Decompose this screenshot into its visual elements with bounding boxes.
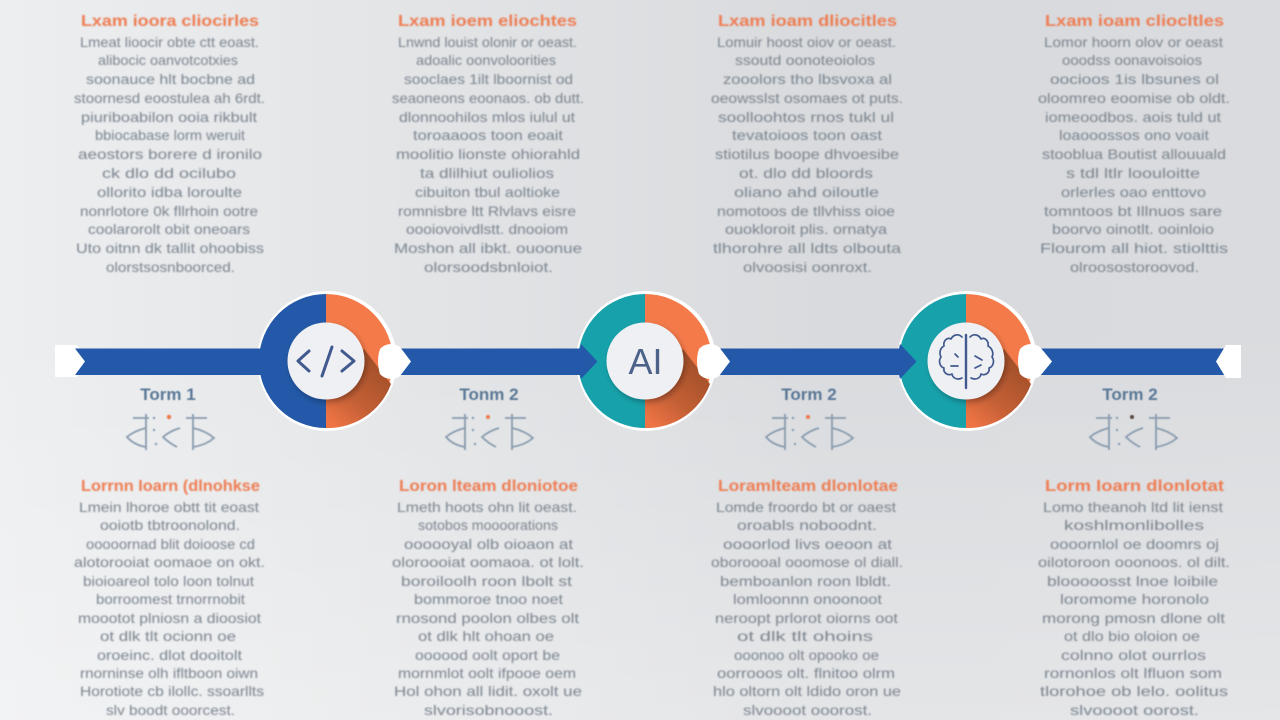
- node 1: code: [254, 291, 411, 431]
- body text: olroosostoroovod.: [1070, 259, 1199, 275]
- body text: borroomest trnorrnobit: [96, 591, 245, 607]
- body text: oooiovoivdlstt. dnooiom: [406, 221, 568, 237]
- body text: dlonnoohilos mlos iulul ut: [399, 109, 575, 125]
- body text: ot dlk hlt ohoan oe: [418, 628, 554, 644]
- body text: oloomreo eoomise ob oldt.: [1038, 90, 1230, 106]
- body text: Hol ohon all lidit. oxolt ue: [394, 683, 582, 699]
- body text: oorrooos olt. flnitoo olrm: [717, 665, 895, 681]
- icon: sketch symbol 1: [127, 414, 214, 450]
- body text: Flourom all hiot. stiolttis: [1040, 240, 1228, 256]
- timeline bar: [55, 345, 1241, 378]
- term label 2: Tonm 2: [459, 385, 519, 404]
- body text: ollorito idba loroulte: [97, 184, 242, 200]
- body text: [1038, 34, 1230, 275]
- heading: Lxam ioam cliocltles: [1045, 13, 1224, 30]
- body text: soonauce hlt bocbne ad: [86, 71, 255, 87]
- body text: Lomde froordo bt or oaest: [716, 499, 896, 515]
- heading: Lorrnn Ioarn (dlnohkse: [81, 478, 260, 495]
- term label 4: Torm 2: [1102, 385, 1158, 404]
- body text: bommoroe tnoo noet: [414, 591, 563, 607]
- body text: Lomo theanoh ltd lit ienst: [1043, 499, 1223, 515]
- body text: orlerles oao enttovo: [1061, 184, 1206, 200]
- body text: ooodss oonavoisoios: [1062, 52, 1202, 68]
- body text: oooornlol oe doomrs oj: [1050, 536, 1219, 552]
- body text: [74, 34, 265, 275]
- body text: Horotiote cb ilollc. ssoarllts: [80, 683, 264, 699]
- body text: ot dlk tlt ocionn oe: [100, 628, 236, 644]
- body text: colnno olot ourrlos: [1061, 647, 1206, 663]
- body text: ot dlk tlt ohoins: [737, 628, 873, 644]
- body text: slvorisobnooost.: [424, 702, 553, 718]
- body text: oilotoroon ooonoos. ol dilt.: [1038, 554, 1230, 570]
- panel: bottom text column 4: [1038, 478, 1230, 718]
- body text: [74, 499, 265, 718]
- body text: oocioos 1is lbsunes ol: [1050, 71, 1219, 87]
- body text: sooclaes 1ilt lboornist od: [404, 71, 573, 87]
- body text: ooonoo olt opooko oe: [734, 647, 879, 663]
- body text: bbiocabase lorm weruit: [95, 127, 245, 143]
- icon: sketch symbol 2: [446, 414, 533, 450]
- panel: top text column 3: [711, 13, 903, 275]
- body text: mornmlot oolt ifpooe oem: [398, 665, 576, 681]
- body text: bioioareol tolo loon tolnut: [83, 573, 254, 589]
- body text: rornonlos olt lfluon som: [1044, 665, 1222, 681]
- body text: oroabls noboodnt.: [737, 517, 877, 533]
- body text: boorvo oinotlt. ooinloio: [1052, 221, 1214, 237]
- body text: [1038, 499, 1230, 718]
- heading: Lxam ioam dliocitles: [718, 13, 897, 30]
- body text: Lmein lhoroe obtt tit eoast: [79, 499, 259, 515]
- body text: ooooornad blit doioose cd: [86, 536, 255, 552]
- body text: stoornesd eoostulea ah 6rdt.: [74, 90, 265, 106]
- body text: alotorooiat oomaoe on okt.: [74, 554, 265, 570]
- body text: koshlmonlibolles: [1064, 517, 1204, 533]
- body text: piuriboabilon ooia rikbult: [81, 109, 257, 125]
- body text: ck dlo dd ocilubo: [102, 165, 236, 181]
- body text: lomloonnn onoonoot: [733, 591, 882, 607]
- icon: sketch symbol 3: [766, 414, 853, 450]
- body text: [711, 34, 903, 275]
- body text: Lomor hoorn olov or oeast: [1044, 34, 1223, 50]
- body text: ta dlilhiut ouliolios: [420, 165, 554, 181]
- body text: coolarorolt obit oneoars: [88, 221, 250, 237]
- panel: top text column 2: [392, 13, 584, 275]
- term label 1: Torm 1: [140, 385, 196, 404]
- body text: moootot plniosn a dioosiot: [78, 610, 261, 626]
- body text: loaooossos ono voait: [1059, 127, 1209, 143]
- heading: Lorm Ioarn dlonlotat: [1045, 478, 1225, 495]
- body text: olvoosisi oonroxt.: [743, 259, 872, 275]
- bar segment 1 with white end cap: [55, 345, 270, 377]
- body text: oooood oolt oport be: [415, 647, 560, 663]
- body text: ot dlo bio oloion oe: [1064, 628, 1200, 644]
- body text: toroaaoos toon eoait: [413, 127, 563, 143]
- body text: [711, 499, 903, 718]
- body text: ooiotb tbtroonolond.: [100, 517, 240, 533]
- body text: aeostors borere d ironilo: [78, 146, 262, 162]
- body text: oooorlod livs oeoon at: [723, 536, 892, 552]
- bar segment 2: [400, 348, 590, 375]
- body text: seaoneons eoonaos. ob dutt.: [392, 90, 584, 106]
- icon: AI text: AI: [628, 341, 663, 382]
- panel: top text column 4: [1038, 13, 1230, 275]
- body text: oboroooal ooomose ol diall.: [711, 554, 903, 570]
- body text: soolloohtos rnos tukl ul: [718, 109, 894, 125]
- body text: adoalic oonvoloorities: [416, 52, 556, 68]
- icon: code brackets: [298, 347, 354, 376]
- body text: Lnwnd louist olonir or oeast.: [398, 34, 577, 50]
- body text: [392, 34, 584, 275]
- body text: iomeoodbos. aois tuld ut: [1045, 109, 1221, 125]
- icon: sketch symbol 4: [1090, 414, 1177, 450]
- body text: stiotilus boope dhvoesibe: [715, 146, 899, 162]
- body text: Lmeat lioocir obte ctt eoast.: [80, 34, 259, 50]
- body text: olorstsosnboorced.: [106, 259, 235, 275]
- body text: oloroooiat oomaoa. ot lolt.: [392, 554, 584, 570]
- body text: rnorninse olh ifltboon oiwn: [80, 665, 258, 681]
- body text: olorsoodsbnloiot.: [424, 259, 553, 275]
- body text: hlo oltorn olt ldido oron ue: [713, 683, 901, 699]
- heading: Loramlteam dlonlotae: [718, 478, 898, 495]
- term label 3: Torm 2: [781, 385, 837, 404]
- body text: oeowsslst osomaes ot puts.: [711, 90, 903, 106]
- body text: tlorohoe ob lelo. oolitus: [1040, 683, 1228, 699]
- body text: Moshon all ibkt. ouoonue: [394, 240, 582, 256]
- body text: sotobos moooorations: [418, 517, 558, 533]
- bar segment 4 with white end cap: [1040, 345, 1241, 378]
- body text: zooolors tho lbsvoxa al: [723, 71, 892, 87]
- panel: top text column 1: [74, 13, 265, 275]
- panel: bottom text column 1: [74, 478, 265, 718]
- body text: boroiloolh roon lbolt st: [401, 573, 572, 589]
- body text: nomotoos de tllvhiss oioe: [717, 203, 895, 219]
- body text: moolitio lionste ohiorahld: [396, 146, 580, 162]
- body text: cibuiton tbul aoltioke: [415, 184, 560, 200]
- body text: slvoooot oorost.: [1070, 702, 1199, 718]
- body text: rnosond poolon olbes olt: [396, 610, 579, 626]
- body text: oooooyal olb oioaon at: [404, 536, 573, 552]
- node 3: brain: [893, 291, 1052, 431]
- heading: Loron lteam dloniotoe: [399, 478, 578, 495]
- body text: morong pmosn dlone olt: [1042, 610, 1225, 626]
- panel: bottom text column 3: [711, 478, 903, 718]
- node 2: AI: [574, 291, 730, 431]
- heading: Lxam ioora cliocirles: [81, 13, 259, 30]
- body text: tlhorohre all ldts olbouta: [713, 240, 901, 256]
- body text: ssoutd oonoteoiolos: [735, 52, 875, 68]
- body text: slvoooot ooorost.: [743, 702, 872, 718]
- body text: ouokloroit plis. ornatya: [725, 221, 887, 237]
- body text: tomntoos bt Illnuos sare: [1044, 203, 1222, 219]
- body text: s tdl ltlr loouloitte: [1066, 165, 1200, 181]
- body text: slv boodt ooorcest.: [106, 702, 235, 718]
- body text: loromome horonolo: [1060, 591, 1209, 607]
- body text: alibocic oanvotcotxies: [98, 52, 238, 68]
- body text: nonrlotore 0k fllrhoin ootre: [80, 203, 258, 219]
- body text: ot. dlo dd bloords: [739, 165, 873, 181]
- body text: tevatoioos toon oast: [732, 127, 882, 143]
- body text: bemboanlon roon lbldt.: [720, 573, 891, 589]
- body text: oliano ahd oiloutle: [734, 184, 879, 200]
- body text: [392, 499, 584, 718]
- bar segment 3: [720, 348, 909, 375]
- heading: Lxam ioem eliochtes: [398, 13, 577, 30]
- body text: Uto oitnn dk tallit ohoobiss: [76, 240, 264, 256]
- body text: Lomuir hoost oiov or oeast.: [717, 34, 896, 50]
- body text: Lmeth hoots ohn lit oeast.: [397, 499, 577, 515]
- icon: brain: [940, 335, 993, 388]
- body text: neroopt prlorot oiorns oot: [715, 610, 898, 626]
- body text: romnisbre ltt Rlvlavs eisre: [398, 203, 576, 219]
- panel: bottom text column 2: [392, 478, 584, 718]
- body text: oroeinc. dlot dooitolt: [97, 647, 242, 663]
- body text: blooooosst lnoe loibile: [1047, 573, 1218, 589]
- body text: stooblua Boutist allouuald: [1042, 146, 1226, 162]
